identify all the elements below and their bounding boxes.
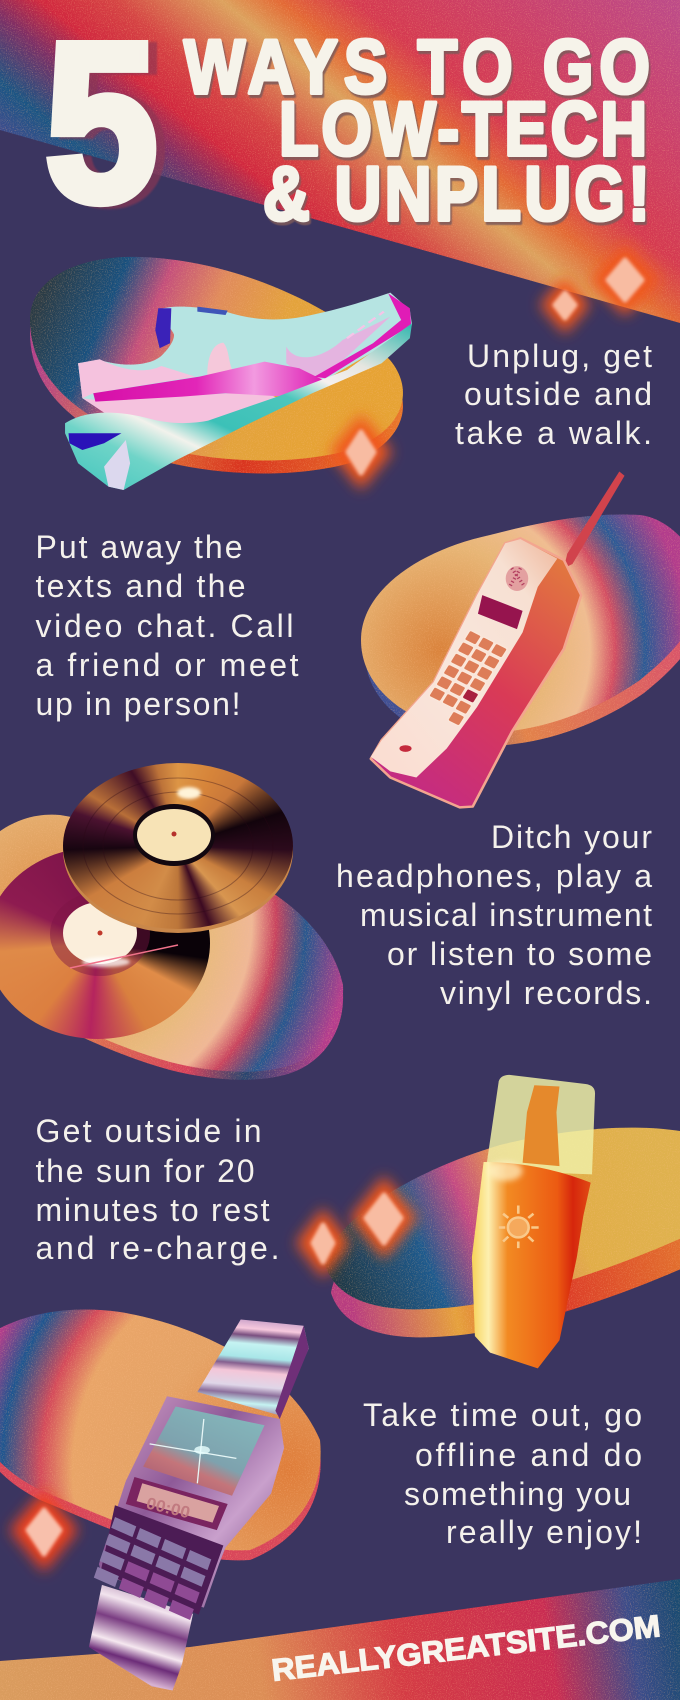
text: sun: the sun for 20 (36, 1153, 254, 1189)
panel: sneaker (30, 257, 412, 490)
text: call a friend: a friend or meet (36, 647, 299, 683)
top gradient banner (0, 0, 680, 323)
icon: sunscreen bottle (472, 1075, 595, 1368)
sun logo (499, 1205, 539, 1248)
title line 2: LOW-TECH (279, 86, 647, 171)
gradient disc: sneaker (30, 257, 403, 474)
title (45, 0, 650, 248)
website url: REALLYGREATSITE.COM (270, 1608, 662, 1688)
sparkle diamond (330, 414, 392, 490)
text: take time out (363, 1397, 642, 1550)
bottom gradient banner (0, 1579, 680, 1700)
text: ditch headphones: headphones, play a (336, 858, 652, 894)
big number 5: 5 (45, 0, 158, 248)
text: sun: Get outside in (36, 1113, 262, 1149)
panel: sunscreen (296, 1075, 680, 1368)
text: unplug: outside and (464, 376, 652, 412)
text: call a friend: video chat. Call (36, 608, 294, 644)
text: call a friend: up in person! (36, 686, 240, 722)
title line 3: & UNPLUG! (263, 151, 650, 236)
text: ditch headphones: musical instrument (360, 897, 652, 933)
text: take time out: Take time out, go (363, 1397, 642, 1433)
text: unplug: take a walk. (455, 415, 652, 451)
text: ditch headphones (336, 819, 652, 1011)
gradient disc: records (0, 815, 343, 1080)
text: ditch headphones: vinyl records. (440, 975, 652, 1011)
icon: sneaker (65, 293, 412, 490)
gradient disc: watch (0, 1309, 321, 1560)
text: take time out: really enjoy! (446, 1514, 642, 1550)
icon: calculator watch: 00:00 (144, 1494, 192, 1522)
text: call a friend: Put away the (36, 529, 242, 565)
panel: vinyl records (0, 763, 343, 1080)
text: unplug (455, 338, 652, 451)
text: call a friend: texts and the (36, 568, 246, 604)
text: unplug: Unplug, get (467, 338, 652, 374)
text: call a friend (36, 529, 299, 722)
text: take time out: something you (404, 1476, 631, 1512)
icon: brick phone (371, 472, 625, 807)
gradient disc: phone (361, 514, 680, 746)
phone keypad (421, 630, 508, 726)
text: sun: minutes to rest (36, 1192, 270, 1228)
text: ditch headphones: Ditch your (491, 819, 652, 855)
title line 1: WAYS TO GO (184, 24, 650, 109)
gradient disc: sunscreen (325, 1128, 680, 1337)
text: sun: and re-charge. (36, 1230, 280, 1266)
text: ditch headphones: or listen to some (387, 936, 652, 972)
icon: upper vinyl record (63, 763, 293, 933)
panel: watch (0, 1309, 321, 1691)
sparkle diamonds top (540, 244, 660, 334)
icon: lower vinyl record (0, 847, 210, 1039)
sparkle diamonds (296, 1176, 418, 1278)
sparkle diamond (10, 1490, 78, 1572)
text: sun (36, 1113, 280, 1266)
text: take time out: offline and do (415, 1437, 642, 1473)
panel: phone (361, 472, 680, 807)
watch keypad (94, 1517, 211, 1620)
icon: calculator watch (89, 1319, 309, 1691)
